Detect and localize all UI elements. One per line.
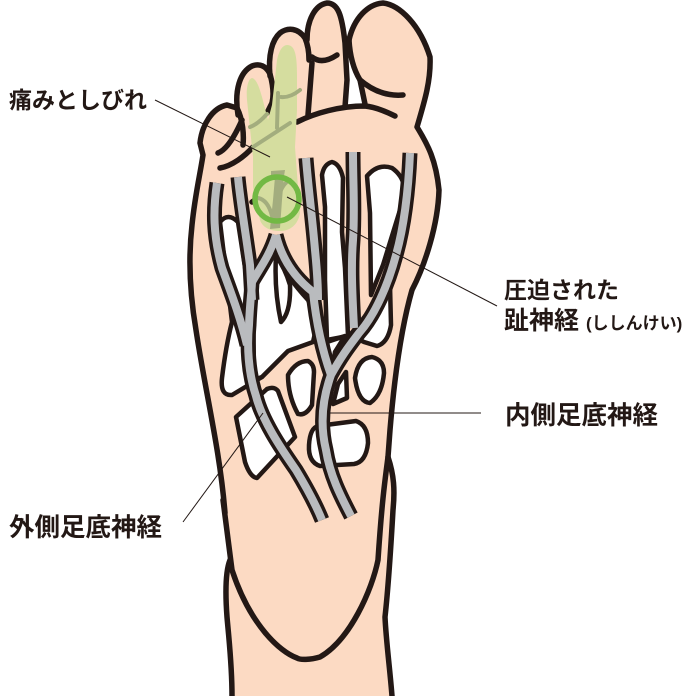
- label: compressed digital nerve: [504, 277, 682, 335]
- green circle around compressed nerve: [255, 177, 299, 221]
- label: medial plantar nerve: 内側足底神経: [505, 402, 659, 430]
- leader line: pain: [155, 100, 270, 157]
- bone: tarsal 1: [288, 361, 314, 414]
- creases and nerve seen through green area: [250, 90, 300, 229]
- metatarsal and tarsal bones: [220, 162, 404, 478]
- leader line: medial nerve: [327, 412, 481, 414]
- green pain area: [247, 45, 300, 231]
- foot skin silhouette: [190, 3, 439, 696]
- leader line: compressed nerve: [287, 197, 497, 306]
- bone: cuneiform: [309, 421, 368, 466]
- label: lateral plantar nerve: 外側足底神経: [9, 514, 163, 542]
- label: compressed digital nerve: 圧迫された: [504, 277, 619, 303]
- bone: cuboid: [236, 388, 295, 478]
- leader line: lateral nerve: [183, 413, 263, 522]
- nerves: grey core: [214, 152, 410, 520]
- label: compressed digital nerve: 趾神経: [504, 307, 579, 335]
- foot outline: [190, 3, 439, 696]
- nerves: dark outline: [214, 152, 410, 520]
- label: compressed digital nerve: (ししんけい): [586, 314, 682, 333]
- label: pain and numbness: 痛みとしびれ: [9, 87, 147, 113]
- bone: tarsal 2: [355, 357, 384, 403]
